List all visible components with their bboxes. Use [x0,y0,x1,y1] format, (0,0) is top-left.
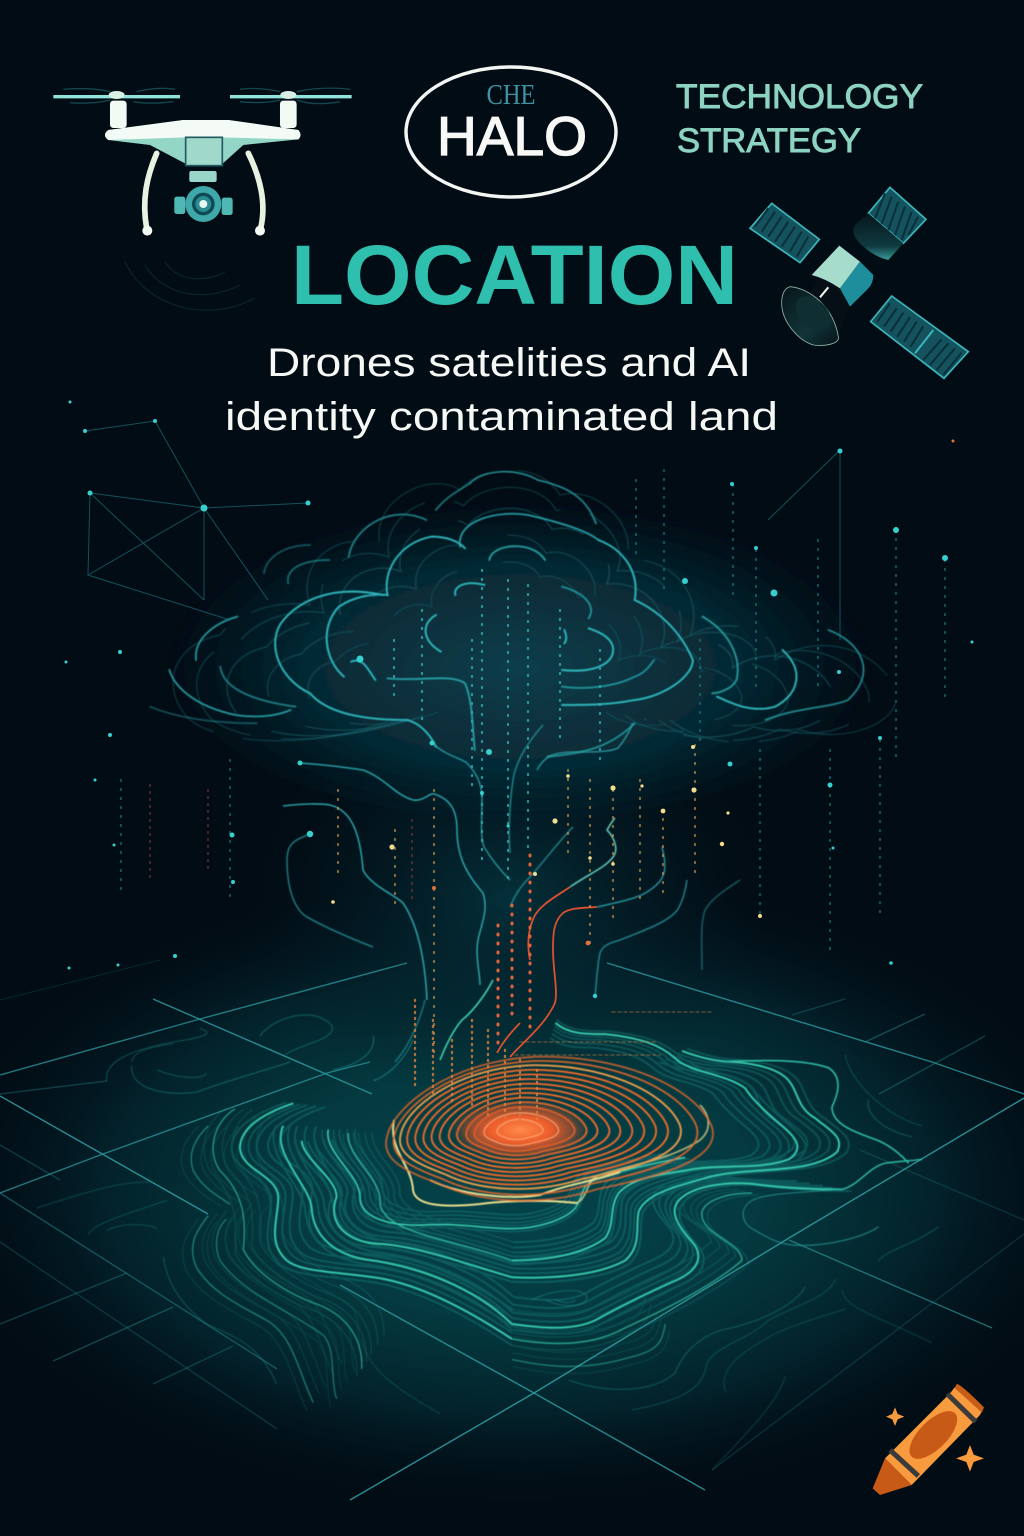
solar panel top right [868,187,926,243]
crayon bands [890,1394,976,1476]
camera mount [189,171,217,182]
crayon tip [873,1458,912,1495]
contour map of contaminated land [37,1015,939,1470]
sparkles [886,1407,904,1426]
perspective grid on ground [0,960,1024,1500]
wavy main teal contours [191,1023,842,1403]
icon: satellite [750,187,968,378]
heading: technology strategy [676,78,923,160]
dish [782,287,838,345]
heading: technology strategy: STRATEGY [677,122,861,160]
trunk glow [250,690,770,1110]
icon: drone [53,88,352,236]
floor glow [0,850,1024,1536]
orange hot contours [386,1057,713,1201]
subtitle: Drones satelities and AI [267,341,751,385]
camera [174,197,185,214]
glowing data points [64,400,974,998]
icon: crayon logo [873,1384,984,1495]
faint density contours [181,1020,852,1411]
subtitle [225,341,778,439]
heading: technology strategy: TECHNOLOGY [676,78,923,116]
bright cloud strokes [150,472,864,757]
drone body [105,120,300,166]
red contamination stream [497,887,597,1057]
solar panel left [750,203,819,263]
outer faint contours [37,1015,939,1470]
cloud plume [150,470,896,820]
yellow transition contours [393,1105,708,1206]
drone signal arcs [125,262,255,310]
crayon oval [902,1403,965,1467]
trunk streams rising from ground [283,723,740,1062]
satellite body [812,246,860,288]
rotor blades [53,88,352,104]
solar panel bottom right [871,296,968,378]
data dot columns [121,470,945,1125]
hotspot [450,1100,590,1160]
title: location: LOCATION [291,228,738,322]
satellite connector [800,277,850,340]
landing legs [145,153,263,228]
logo: The HALO [406,67,616,197]
subtitle: identity contaminated land [225,395,778,439]
crayon body [885,1385,983,1485]
motors [110,101,127,128]
logo: The HALO: CHE [486,80,536,111]
network lines [85,421,840,640]
logo: The HALO: HALO [437,105,587,167]
